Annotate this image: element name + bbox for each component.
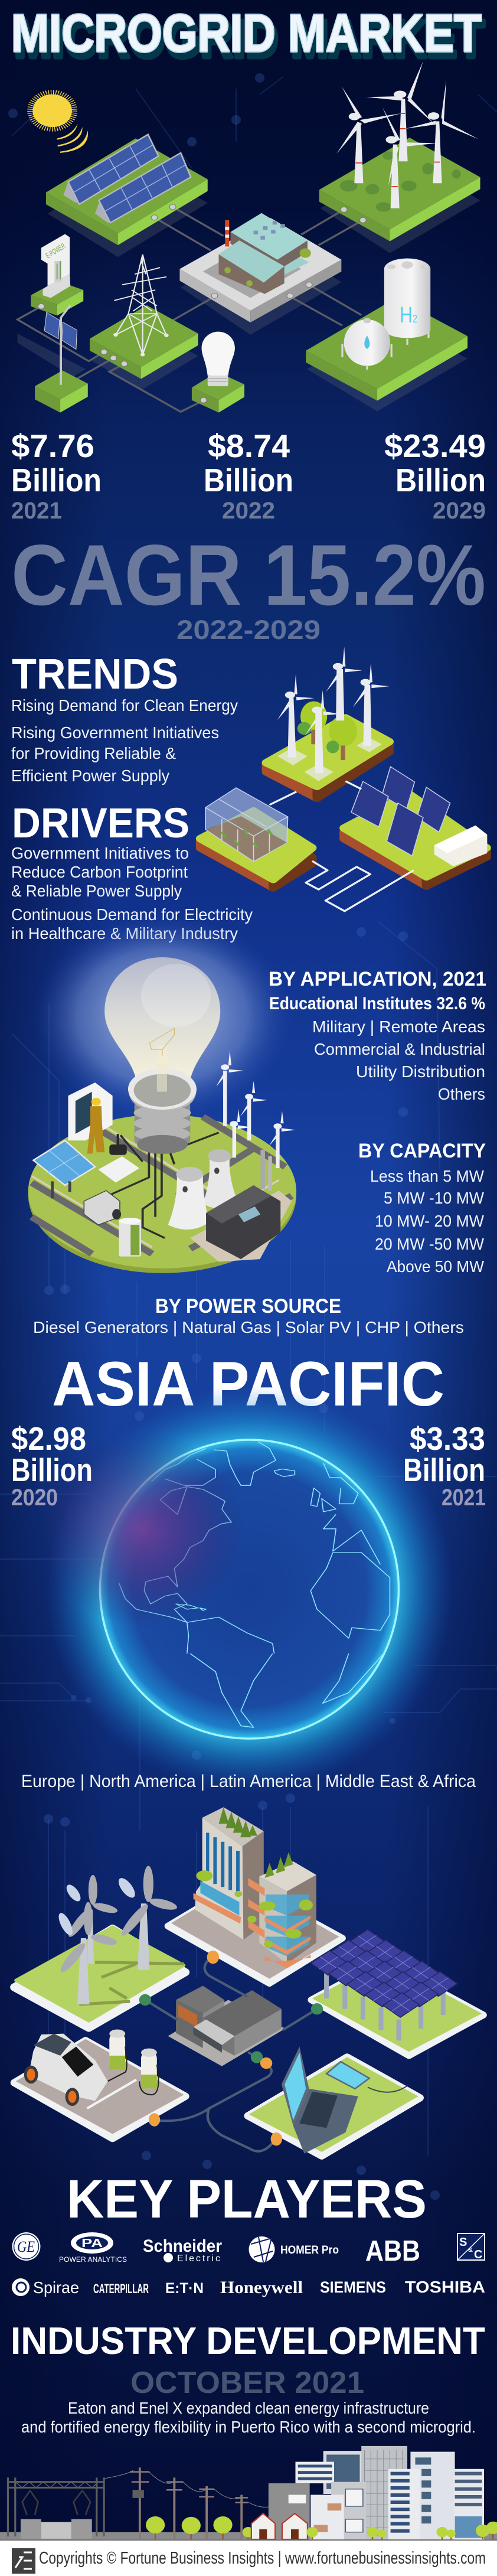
text: drivers list: Reduce Carbon Footprint bbox=[11, 863, 188, 881]
stat: 2022 market size: $8.74 bbox=[208, 428, 290, 464]
label: E-POWER on charger: E-POWER bbox=[44, 242, 67, 260]
wind turbines bbox=[56, 1866, 178, 2004]
heading: industry development: INDUSTRY DEVELOPMENT bbox=[11, 2319, 485, 2362]
text: by capacity: Above 50 MW bbox=[387, 1257, 485, 1276]
logo: Power Analytics bbox=[59, 2232, 127, 2264]
globe bbox=[46, 1385, 453, 1793]
platform shadows bbox=[18, 158, 480, 411]
heading: key players: KEY PLAYERS bbox=[67, 2169, 427, 2229]
text: by power source bbox=[33, 1295, 464, 1336]
text: by capacity: 20 MW -50 MW bbox=[375, 1235, 485, 1253]
electric car bbox=[24, 2034, 108, 2106]
text: drivers list: Government Initiatives to bbox=[11, 844, 189, 862]
utility poles bbox=[104, 2467, 276, 2539]
stat: 2021 market size bbox=[11, 428, 102, 524]
text: by application bbox=[269, 968, 486, 1103]
cooling towers bbox=[168, 1149, 238, 1230]
logo: Spirae: Spirae bbox=[33, 2278, 79, 2297]
text: drivers list: & Reliable Power Supply bbox=[11, 882, 182, 900]
platform: solar panels bbox=[46, 135, 208, 245]
text: trends list: Efficient Power Supply bbox=[11, 767, 169, 785]
illustration: city skyline and substation bbox=[0, 2446, 497, 2541]
platform: central plant building bbox=[179, 213, 341, 322]
factory bbox=[206, 1150, 280, 1259]
text: by capacity: Less than 5 MW bbox=[370, 1167, 485, 1185]
connecting wires bbox=[269, 781, 414, 911]
text: by application: Military | Remote Areas bbox=[312, 1018, 485, 1036]
stat: asia pacific 2020 bbox=[11, 1420, 93, 1511]
generator bbox=[84, 1191, 121, 1225]
stat: 2022 market size: 2022 bbox=[222, 498, 275, 524]
stat: 2022 market size: Billion bbox=[204, 462, 293, 498]
logo: GE: GE bbox=[17, 2238, 35, 2255]
platform: light bulb bbox=[192, 332, 244, 413]
island: greenhouse bbox=[200, 788, 312, 888]
logo: Spirae bbox=[12, 2278, 79, 2297]
stat: CAGR: 2022-2029 bbox=[176, 615, 321, 645]
plug and socket bbox=[98, 1134, 139, 1183]
illustration: light bulb city bbox=[28, 914, 296, 1273]
stat: 2029 market size: $23.49 bbox=[384, 428, 486, 464]
stat: asia pacific 2020: $2.98 bbox=[11, 1420, 86, 1457]
trees bbox=[146, 2516, 493, 2539]
platform: laptop and phone bbox=[248, 2047, 420, 2156]
text: by capacity: 10 MW- 20 MW bbox=[375, 1212, 485, 1230]
text: other regions: Europe | North America | Latin America | Middle East & Africa bbox=[21, 1772, 476, 1791]
small turbines bbox=[216, 1051, 296, 1168]
battery bbox=[119, 1218, 141, 1257]
logo: Schneider Electric: Schneider bbox=[143, 2236, 222, 2256]
footer logo bbox=[12, 2548, 35, 2574]
text: drivers list bbox=[11, 844, 253, 943]
platform: hydrogen storage bbox=[306, 258, 467, 401]
logo: Power Analytics: POWER ANALYTICS bbox=[59, 2255, 127, 2264]
stat: 2029 market size: Billion bbox=[395, 462, 486, 498]
logo: Caterpillar: CATERPILLAR bbox=[93, 2281, 149, 2296]
logo: ABB: ABB bbox=[365, 2235, 420, 2267]
label: H2 on tank: H2 bbox=[400, 303, 417, 328]
logo: Siemens: SIEMENS bbox=[320, 2278, 386, 2296]
ground bbox=[0, 2532, 497, 2540]
stat: asia pacific 2021: $3.33 bbox=[410, 1420, 485, 1457]
control cabinet and worker bbox=[68, 1082, 113, 1154]
stat: 2022 market size bbox=[204, 428, 293, 524]
green building bbox=[194, 1807, 316, 1968]
text: by power source: Diesel Generators | Natural Gas | Solar PV | CHP | Others bbox=[33, 1318, 464, 1336]
platform: building bbox=[168, 1881, 342, 1983]
heading: trends: TRENDS bbox=[12, 651, 178, 698]
stat: 2029 market size bbox=[384, 428, 486, 524]
text: development summary bbox=[21, 2399, 476, 2436]
island: wind and trees bbox=[266, 647, 389, 798]
bulb glow bbox=[32, 914, 292, 1120]
text: by application: BY APPLICATION, 2021 bbox=[269, 968, 486, 990]
text: trends list: for Providing Reliable & bbox=[11, 744, 176, 762]
logo: GE bbox=[12, 2232, 40, 2261]
logo: S&C: & bbox=[468, 2246, 473, 2254]
solar array bbox=[310, 1929, 457, 2040]
heading: asia pacific: ASIA PACIFIC bbox=[52, 1348, 444, 1419]
stat: asia pacific 2021 bbox=[403, 1420, 486, 1511]
logo: Schneider Electric bbox=[143, 2236, 222, 2264]
text: development summary: Eaton and Enel X expanded clean energy infrastructure bbox=[68, 2399, 429, 2417]
illustration: energy islands bbox=[200, 647, 487, 911]
icon: sun bbox=[31, 93, 88, 153]
text: by capacity: BY CAPACITY bbox=[358, 1140, 486, 1162]
platform: solar street light bbox=[35, 305, 88, 413]
connection cables bbox=[18, 207, 363, 412]
stat: 2029 market size: 2029 bbox=[433, 498, 486, 524]
text: trends list: Rising Government Initiatives bbox=[11, 723, 219, 742]
cable connectors bbox=[38, 204, 366, 403]
logo: S&C: S bbox=[459, 2236, 467, 2249]
platform: charging station bbox=[31, 234, 83, 315]
logo: Eaton: E:T·N bbox=[165, 2280, 204, 2297]
text: by power source: BY POWER SOURCE bbox=[155, 1295, 341, 1318]
platform: wind farm bbox=[14, 1927, 185, 2028]
logo: Power Analytics: PA bbox=[81, 2237, 103, 2250]
stat: 2021 market size: 2021 bbox=[11, 498, 62, 524]
stat: 2021 market size: $7.76 bbox=[11, 428, 94, 464]
foreground trees bbox=[306, 2522, 497, 2539]
heading: drivers: DRIVERS bbox=[12, 800, 189, 847]
illustration: smart grid city bbox=[14, 1807, 483, 2156]
logos: key players bbox=[12, 2232, 485, 2297]
buildings bbox=[251, 2446, 484, 2541]
central factory bbox=[168, 1986, 285, 2066]
logo: S&C: C bbox=[474, 2248, 482, 2261]
stat: 2021 market size: Billion bbox=[11, 462, 102, 498]
cables bbox=[145, 1958, 317, 2151]
island: solar array with inverter bbox=[344, 767, 487, 886]
logo: S&C bbox=[457, 2233, 485, 2261]
platform: transmission tower bbox=[90, 255, 198, 379]
light bulb bbox=[104, 957, 220, 1154]
footer bbox=[0, 2541, 497, 2576]
cable connectors bbox=[139, 1951, 323, 2145]
logo: Schneider Electric: Electric bbox=[177, 2254, 220, 2264]
text: drivers list: Continuous Demand for Electricity bbox=[11, 905, 253, 924]
text: trends list: Rising Demand for Clean Energy bbox=[11, 696, 238, 715]
solar panel bbox=[33, 1140, 95, 1198]
bulb base wires bbox=[108, 1133, 219, 1238]
logo: Toshiba: TOSHIBA bbox=[405, 2278, 485, 2296]
platform: solar farm bbox=[311, 1961, 483, 2056]
logo: HOMER Pro: HOMER Pro bbox=[280, 2244, 339, 2257]
logo: Honeywell: Honeywell bbox=[220, 2278, 303, 2297]
text: by application: Commercial & Industrial bbox=[314, 1040, 485, 1058]
stat: asia pacific 2020: Billion bbox=[11, 1452, 93, 1488]
text: trends list bbox=[11, 696, 238, 785]
purple glow bbox=[38, 1432, 245, 1627]
city disc bbox=[28, 1051, 296, 1273]
date: october 2021: OCTOBER 2021 bbox=[130, 2366, 364, 2400]
platform: ev charging bbox=[14, 2039, 185, 2138]
globe continents bbox=[119, 1442, 390, 1654]
text: by capacity: 5 MW -10 MW bbox=[384, 1189, 485, 1207]
platform: wind turbines bbox=[319, 61, 480, 241]
logo: HOMER Pro bbox=[249, 2236, 339, 2262]
stat: asia pacific 2021: 2021 bbox=[442, 1485, 486, 1511]
text: by capacity bbox=[358, 1140, 486, 1276]
substation bbox=[8, 2477, 104, 2539]
text: by application: Others bbox=[438, 1085, 485, 1103]
text: by application: Utility Distribution bbox=[356, 1062, 485, 1081]
stat: asia pacific 2020: 2020 bbox=[11, 1485, 58, 1511]
text: drivers list: in Healthcare & Military Industry bbox=[11, 924, 238, 943]
ev chargers bbox=[108, 2029, 158, 2095]
illustration: microgrid network bbox=[18, 61, 480, 413]
